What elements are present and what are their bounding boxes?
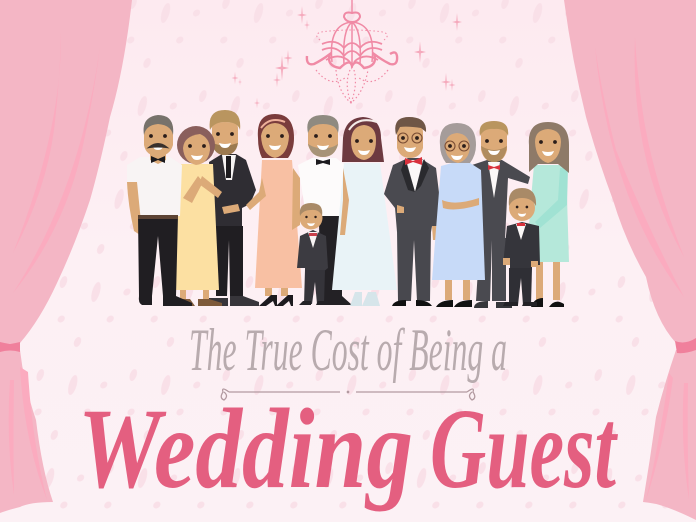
left curtain bbox=[0, 0, 132, 513]
right curtain bbox=[564, 0, 696, 520]
small boy in black suit bbox=[503, 188, 540, 306]
groom in grey suit bbox=[384, 117, 443, 306]
ornamental divider bbox=[221, 389, 475, 400]
bearded man in grey suit bbox=[472, 121, 530, 308]
sparkles bbox=[232, 6, 462, 108]
main title: Guest bbox=[430, 385, 618, 512]
small boy in dark suit bbox=[297, 203, 328, 305]
grey-haired man in white shirt bbox=[298, 115, 352, 305]
man in black suit bbox=[208, 110, 259, 306]
woman in yellow dress bbox=[173, 126, 222, 306]
woman in peach dress bbox=[246, 114, 302, 306]
main title: Wedding bbox=[78, 385, 413, 512]
grandmother in blue dress bbox=[432, 123, 485, 307]
chandelier bbox=[307, 0, 397, 103]
woman in mint dress bbox=[527, 122, 569, 307]
man with moustache, white shirt bbox=[127, 115, 192, 306]
wedding party illustration bbox=[127, 110, 569, 308]
bride in white dress bbox=[332, 117, 397, 306]
